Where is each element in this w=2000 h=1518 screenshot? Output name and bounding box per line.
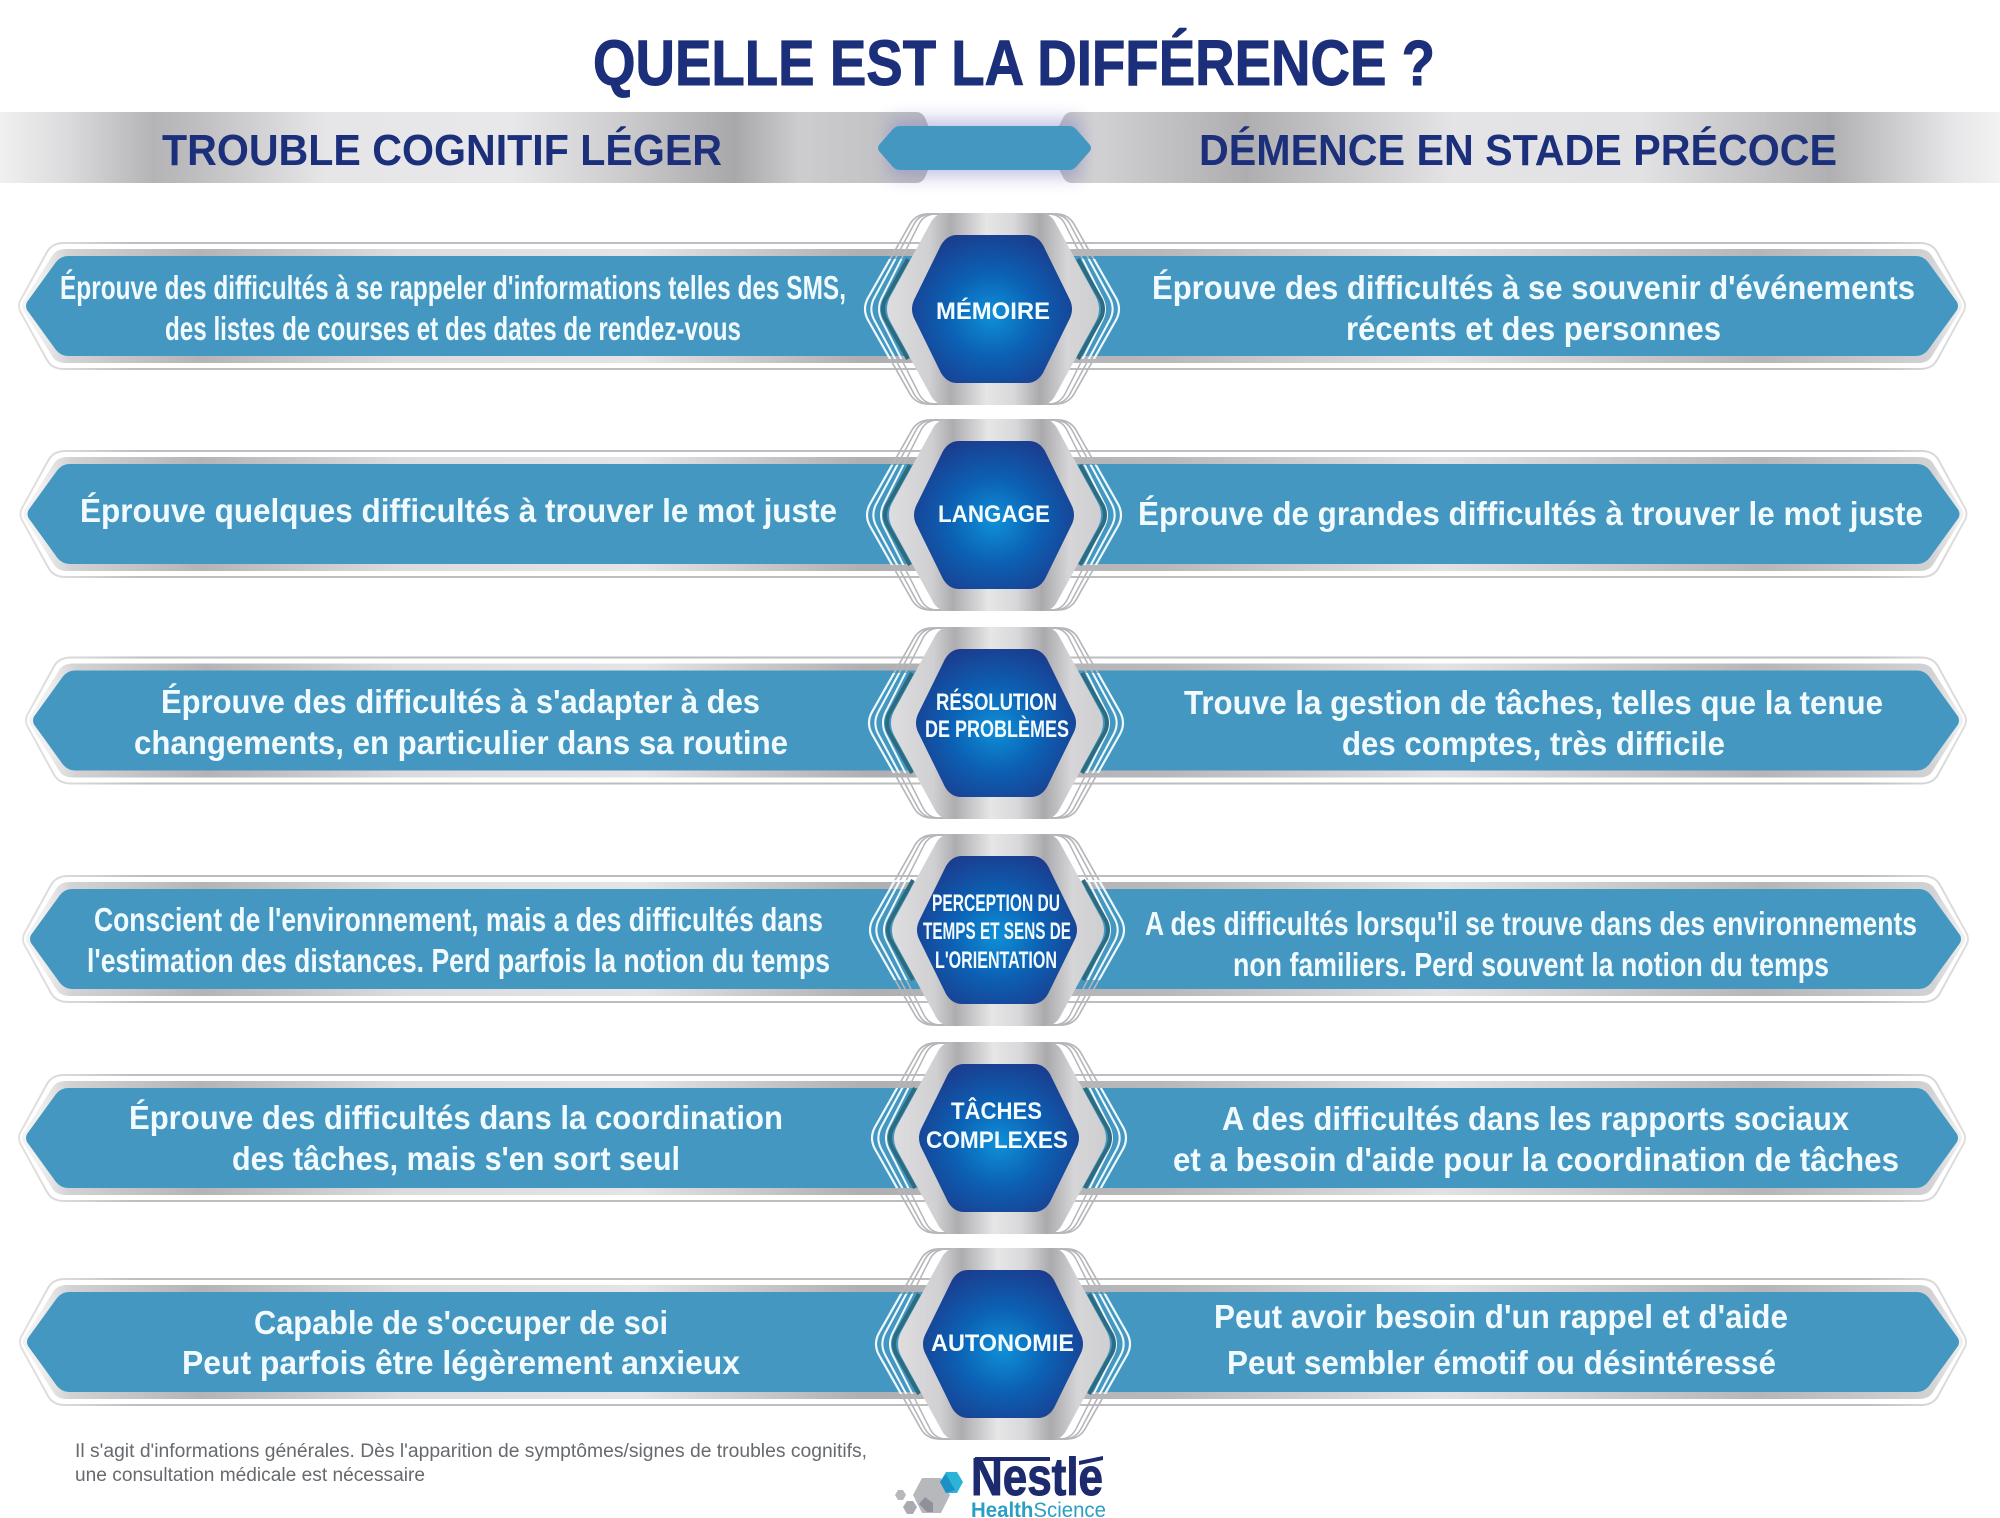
left text: Éprouve des difficultés dans la coordination xyxy=(129,1099,783,1136)
wordmark top bar xyxy=(975,1457,1050,1461)
logo: Nestlé Health Science xyxy=(895,1448,1106,1518)
left text: Capable de s'occuper de soi xyxy=(254,1304,668,1341)
wordmark: Nestle xyxy=(971,1448,1103,1507)
hexagon xyxy=(865,213,1119,405)
band xyxy=(23,876,1968,1002)
label: LANGAGE xyxy=(938,501,1050,528)
footnote xyxy=(75,1441,867,1486)
row: autonomie: Peut parfois être légèrement anxieux xyxy=(182,1344,741,1381)
right text: Éprouve des difficultés à se souvenir d'événements xyxy=(1152,269,1915,306)
label: PERCEPTION DU xyxy=(932,890,1060,917)
icon: hexagon cluster xyxy=(895,1472,963,1514)
row: langage xyxy=(20,419,1966,611)
hexagon xyxy=(876,1248,1130,1440)
header band: right silver bar xyxy=(1057,112,2000,183)
left text: Éprouve des difficultés à s'adapter à des xyxy=(161,683,760,720)
label: TÂCHES xyxy=(951,1097,1042,1125)
row: résolution de problèmes: DE PROBLÈMES xyxy=(925,715,1069,743)
row: mémoire: récents et des personnes xyxy=(1346,310,1721,347)
row: mémoire: des listes de courses et des dates de rendez-vous xyxy=(165,310,741,347)
row: perception du temps: TEMPS ET SENS DE xyxy=(923,918,1071,945)
row: autonomie xyxy=(20,1248,1966,1440)
row: perception du temps: l'estimation des distances. Perd parfois la notion du temps xyxy=(87,942,830,979)
right text: Trouve la gestion de tâches, telles que la tenue xyxy=(1184,684,1883,721)
header band xyxy=(0,112,2000,183)
left text: Éprouve des difficultés à se rappeler d'informations telles des SMS, xyxy=(60,269,846,306)
label: MÉMOIRE xyxy=(936,297,1050,325)
footnote: une consultation médicale est nécessaire xyxy=(75,1465,425,1486)
row: résolution de problèmes: changements, en particulier dans sa routine xyxy=(134,724,788,761)
left text: Éprouve quelques difficultés à trouver le mot juste xyxy=(80,492,837,529)
row: résolution de problèmes xyxy=(26,627,1966,819)
header band: centre glow xyxy=(890,120,1080,176)
header band: left silver bar xyxy=(0,112,930,183)
heading: right column: DÉMENCE EN STADE PRÉCOCE xyxy=(1199,125,1837,175)
row: mémoire xyxy=(19,213,1965,405)
band xyxy=(20,1279,1966,1405)
right text: A des difficultés dans les rapports sociaux xyxy=(1222,1100,1850,1137)
row: perception du temps xyxy=(23,834,1968,1026)
row: tâches complexes: COMPLEXES xyxy=(926,1127,1068,1154)
row: tâches complexes: des tâches, mais s'en sort seul xyxy=(232,1140,680,1177)
heading: left column: TROUBLE COGNITIF LÉGER xyxy=(162,125,722,175)
hexagon xyxy=(869,627,1123,819)
row: perception du temps: L'ORIENTATION xyxy=(935,947,1057,974)
band xyxy=(19,1075,1965,1201)
hexagon xyxy=(867,419,1121,611)
wordmark accent xyxy=(1079,1456,1103,1465)
right text: Peut avoir besoin d'un rappel et d'aide xyxy=(1214,1298,1788,1335)
label: AUTONOMIE xyxy=(931,1330,1074,1357)
header band: centre hexagon xyxy=(878,126,1091,170)
right text: Éprouve de grandes difficultés à trouver le mot juste xyxy=(1138,495,1923,532)
row: tâches complexes xyxy=(19,1042,1965,1234)
hexagon xyxy=(872,1042,1126,1234)
title: QUELLE EST LA DIFFÉRENCE ? xyxy=(593,27,1435,99)
row: tâches complexes: et a besoin d'aide pour la coordination de tâches xyxy=(1173,1141,1899,1178)
row: résolution de problèmes: des comptes, très difficile xyxy=(1342,725,1725,762)
left text: Conscient de l'environnement, mais a des difficultés dans xyxy=(94,901,823,938)
footnote: Il s'agit d'informations générales. Dès l'apparition de symptômes/signes de troubles cognitifs, xyxy=(75,1441,867,1462)
hexagon xyxy=(870,834,1124,1026)
band xyxy=(26,658,1966,784)
band xyxy=(19,243,1965,369)
band xyxy=(20,451,1966,577)
label: RÉSOLUTION xyxy=(936,688,1057,716)
row: autonomie: Peut sembler émotif ou désintéressé xyxy=(1227,1344,1776,1381)
row: perception du temps: non familiers. Perd souvent la notion du temps xyxy=(1233,946,1829,983)
